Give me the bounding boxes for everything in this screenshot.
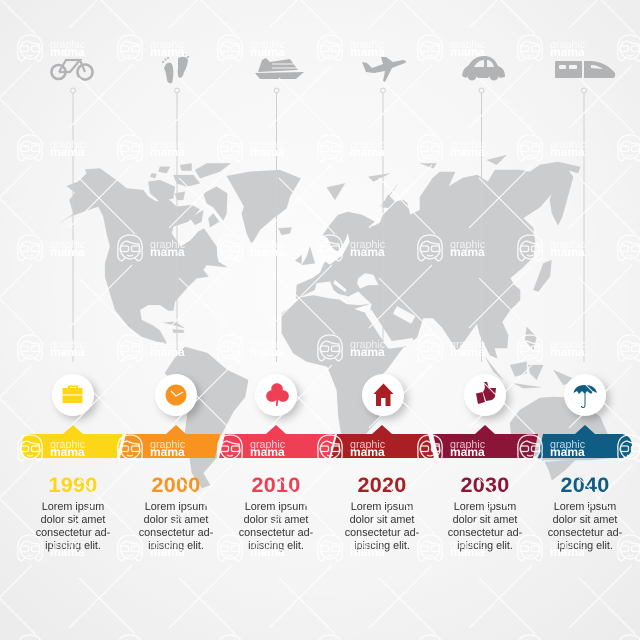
timeline banners xyxy=(22,425,632,458)
text block: 2000: consectetur ad- xyxy=(139,527,214,539)
map: Greenland xyxy=(227,170,301,244)
map: Africa xyxy=(282,155,577,443)
text block: 2030: Lorem ipsum xyxy=(454,501,516,513)
text block: 2000: ipiscing elit. xyxy=(148,540,204,552)
map: Caribbean islands xyxy=(163,322,185,328)
map: South America xyxy=(165,347,248,488)
icon: cruise ship xyxy=(255,58,304,79)
icon: train xyxy=(555,61,615,78)
marker: umbrella xyxy=(564,374,606,416)
text block: 2030: consectetur ad- xyxy=(448,527,523,539)
text block: 2020: consectetur ad- xyxy=(345,527,420,539)
text block: 2010: ipiscing elit. xyxy=(248,540,304,552)
text block: 2040: dolor sit amet xyxy=(553,514,617,526)
icon: car xyxy=(462,56,505,80)
marker: clock xyxy=(155,374,197,416)
text block: 1990: dolor sit amet xyxy=(41,514,105,526)
text block: 2020: ipiscing elit. xyxy=(354,540,410,552)
text block: 1990: ipiscing elit. xyxy=(45,540,101,552)
map: North America xyxy=(60,163,301,344)
map: Australia xyxy=(510,397,610,460)
year labels: 2020 xyxy=(357,473,407,497)
banner: 2000 xyxy=(120,425,220,458)
banner: 1990 xyxy=(22,425,122,458)
text block: 2010: consectetur ad- xyxy=(239,527,314,539)
text block: 2030: dolor sit amet xyxy=(453,514,517,526)
banner: 2030 xyxy=(433,425,538,458)
text block: 2020: Lorem ipsum xyxy=(351,501,413,513)
text block: 2010: Lorem ipsum xyxy=(245,501,307,513)
year labels: 1990 xyxy=(48,473,98,497)
map: Iceland xyxy=(278,227,292,235)
year labels: 2040 xyxy=(560,473,610,497)
banner: 2010 xyxy=(219,425,335,458)
connector lines xyxy=(71,88,586,362)
map: Eurasia xyxy=(296,162,580,358)
banner: 2040 xyxy=(538,425,632,458)
map: seas xyxy=(300,273,413,345)
marker: thumbs up xyxy=(464,374,506,416)
world map xyxy=(60,155,610,488)
year labels: 2010 xyxy=(251,473,301,497)
icon: footprints xyxy=(162,54,189,83)
text block: 2040: Lorem ipsum xyxy=(554,501,616,513)
text block: 1990: Lorem ipsum xyxy=(42,501,104,513)
text block: 2000: dolor sit amet xyxy=(144,514,208,526)
icon: bicycle xyxy=(52,60,92,80)
text block: 2020: dolor sit amet xyxy=(350,514,414,526)
banner: 2020 xyxy=(331,425,434,458)
marker: clover xyxy=(255,374,297,416)
year labels: 2000 xyxy=(151,473,201,497)
text block: 2000: Lorem ipsum xyxy=(145,501,207,513)
text block: 1990: consectetur ad- xyxy=(36,527,111,539)
marker: briefcase xyxy=(52,374,94,416)
icon: airplane xyxy=(362,57,406,82)
text block: 2030: ipiscing elit. xyxy=(457,540,513,552)
year labels xyxy=(48,473,610,497)
text block: 2010: dolor sit amet xyxy=(244,514,308,526)
text block: 2040: consectetur ad- xyxy=(548,527,623,539)
map: northern and Pacific islands xyxy=(302,247,315,265)
year labels: 2030 xyxy=(460,473,510,497)
text block: 2040: ipiscing elit. xyxy=(557,540,613,552)
marker: house xyxy=(362,374,404,416)
